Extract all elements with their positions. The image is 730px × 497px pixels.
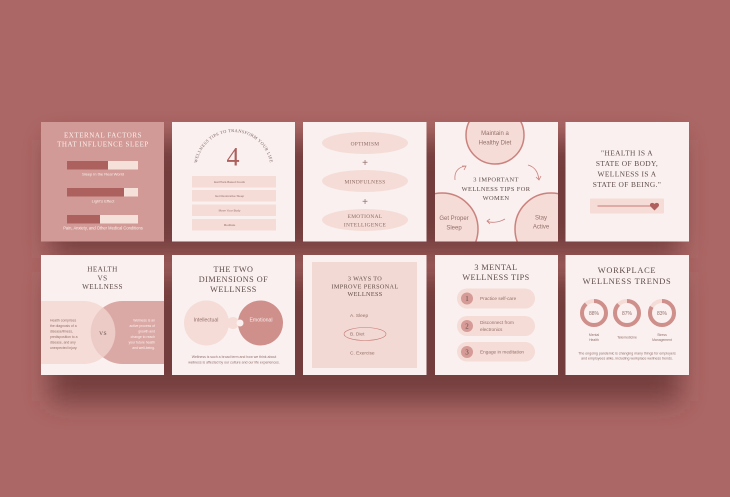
heading: important tips xyxy=(462,176,531,202)
panel: quote xyxy=(566,122,689,242)
pill 3: 3 xyxy=(465,348,469,356)
list of tips: Get Restorative Sleep xyxy=(215,194,244,198)
left text: unexpected injury. xyxy=(50,346,77,350)
donut 83: 83% xyxy=(657,311,668,317)
pill 2: electronics xyxy=(480,327,503,332)
paragraph: The ongoing pandemic is changing many things for employers xyxy=(578,352,676,356)
pill 3 xyxy=(457,342,535,362)
ellipse: emotional intelligence xyxy=(322,209,408,231)
right text: Wellness is an xyxy=(133,318,155,322)
heading: mental tips xyxy=(462,263,530,282)
circle labels: Get Proper xyxy=(439,216,469,222)
heading: health vs wellness: HEALTH xyxy=(87,266,118,274)
pill 2: 2 xyxy=(465,322,469,330)
list of tips: Meditate xyxy=(224,223,236,227)
big number 4: 4 xyxy=(226,142,240,172)
heading: health vs wellness: VS xyxy=(98,274,108,282)
plus: + xyxy=(362,158,368,169)
ellipse: emotional intelligence: INTELLIGENCE xyxy=(344,222,387,228)
bar chart: sleep factors xyxy=(63,161,143,230)
bar chart: sleep factors: Pain, Anxiety, and Other Medical Conditions xyxy=(63,226,143,230)
donut labels xyxy=(589,333,672,342)
circle: emotional: Emotional xyxy=(249,318,273,324)
left text xyxy=(50,318,78,350)
ellipse highlight xyxy=(344,328,386,340)
paragraph xyxy=(188,355,280,364)
circle labels: Maintain a xyxy=(481,131,510,137)
panel: mental wellness tips xyxy=(435,255,558,375)
left text: the diagnosis of a xyxy=(50,324,77,328)
inner panel xyxy=(312,262,417,368)
circles xyxy=(435,122,558,242)
list of tips xyxy=(192,176,276,230)
heart slider xyxy=(590,198,664,214)
heading: curved title: WELLNESS TIPS TO TRANSFORM YOUR LIFE xyxy=(194,129,273,162)
donut 88: 88% xyxy=(589,311,600,317)
panel: important tips for women xyxy=(435,122,558,242)
heading: health vs wellness xyxy=(82,266,123,291)
heading: external factors: THAT INFLUENCE SLEEP xyxy=(57,140,149,148)
heading: external factors xyxy=(57,132,149,148)
list of tips: Eat Plant-Based Foods xyxy=(214,180,245,184)
heading: two dimensions xyxy=(199,265,268,294)
options xyxy=(350,313,375,356)
venn right xyxy=(91,301,164,364)
circle labels xyxy=(439,131,550,232)
ellipse: mindfulness: MINDFULNESS xyxy=(344,179,386,185)
left text: predisposition to a xyxy=(50,335,78,339)
heading: important tips: WOMEN xyxy=(483,195,509,202)
donut labels: Mental xyxy=(589,333,599,337)
panel: optimism mindfulness xyxy=(303,122,426,242)
panel: workplace trends xyxy=(566,255,689,375)
paragraph: wellness is affected by our culture and our life experiences. xyxy=(188,360,280,364)
paragraph: Wellness is such a broad term and how we think about xyxy=(192,355,276,359)
right text: active process of xyxy=(130,324,155,328)
quote text xyxy=(593,148,661,189)
venn left xyxy=(41,301,115,364)
right text: your future health xyxy=(129,340,155,344)
heading: ways to improve xyxy=(332,276,398,298)
right text: change to reach xyxy=(131,335,155,339)
right text: growth and xyxy=(138,330,155,334)
pill 3: Engage in meditation xyxy=(480,350,524,354)
pill 1 xyxy=(457,288,535,308)
circle labels: Stay xyxy=(535,216,547,222)
heading: ways to improve: 3 WAYS TO xyxy=(348,276,382,282)
heading: workplace trends xyxy=(583,266,671,286)
heading: ways to improve: WELLNESS xyxy=(347,291,383,298)
circle labels: Healthy Diet xyxy=(479,140,512,146)
arrows xyxy=(455,165,541,224)
circle: intellectual: Intellectual xyxy=(194,318,218,324)
pill 2: Disconnect from xyxy=(480,320,514,325)
quote text: "HEALTH IS A xyxy=(601,148,653,158)
heading: two dimensions: DIMENSIONS OF xyxy=(199,275,268,284)
quote text: STATE OF BODY, xyxy=(596,159,658,168)
circle labels: Active xyxy=(533,224,550,230)
heading: mental tips: 3 MENTAL xyxy=(474,263,518,272)
heading: workplace trends: WELLNESS TRENDS xyxy=(583,277,671,286)
heading: two dimensions: WELLNESS xyxy=(210,285,257,294)
heading: external factors: EXTERNAL FACTORS xyxy=(64,132,142,140)
left text: disease, and any xyxy=(50,340,76,344)
options: A. Sleep xyxy=(350,313,368,319)
paragraph: and employees alike, including workplace wellness trends. xyxy=(581,356,673,360)
heading: workplace trends: WORKPLACE xyxy=(598,266,656,275)
heading: important tips: 3 IMPORTANT xyxy=(473,176,519,184)
right text xyxy=(129,318,155,350)
pill 1: Practice self-care xyxy=(480,296,517,301)
right text: and well-being. xyxy=(132,346,155,350)
venn overlap xyxy=(91,308,115,358)
quote text: STATE OF BEING." xyxy=(593,180,661,189)
vs label: VS xyxy=(99,331,107,337)
bar chart: sleep factors: Light's Effect xyxy=(92,198,115,204)
donut labels: Management xyxy=(652,338,672,342)
panel: two dimensions xyxy=(172,255,295,375)
donut labels: Health xyxy=(589,338,599,342)
left text: disease/illness, xyxy=(50,330,73,334)
bar chart: sleep factors: Sleep in the Real World xyxy=(82,172,124,176)
panel: external factors xyxy=(41,122,164,242)
panel: health vs wellness xyxy=(41,255,164,375)
options: B. Diet xyxy=(350,332,365,338)
list of tips: Move Your Body xyxy=(219,208,241,212)
heading: mental tips: WELLNESS TIPS xyxy=(462,273,530,282)
connector xyxy=(227,317,239,329)
circle labels: Sleep xyxy=(446,226,462,232)
panel: wellness tips xyxy=(172,122,295,242)
pill 1: 1 xyxy=(465,295,469,303)
plus: + xyxy=(362,197,368,208)
ellipse: optimism: OPTIMISM xyxy=(351,141,379,147)
panel: ways to improve xyxy=(303,255,426,375)
connector dot xyxy=(236,320,244,326)
heading: two dimensions: THE TWO xyxy=(214,265,253,274)
donut labels: Telemedicine xyxy=(617,336,637,340)
ellipse: emotional intelligence: EMOTIONAL xyxy=(348,214,382,220)
heading: health vs wellness: WELLNESS xyxy=(82,283,123,291)
left text: Health comprises xyxy=(50,318,76,322)
quote text: WELLNESS IS A xyxy=(598,170,657,178)
pill 2 xyxy=(457,316,535,336)
donut labels: Stress xyxy=(657,333,667,337)
paragraph xyxy=(578,352,676,360)
donut 87: 87% xyxy=(622,311,633,317)
heading: ways to improve: IMPROVE PERSONAL xyxy=(332,284,398,290)
heading: important tips: WELLNESS TIPS FOR xyxy=(462,186,531,193)
options: C. Exercise xyxy=(350,350,375,356)
